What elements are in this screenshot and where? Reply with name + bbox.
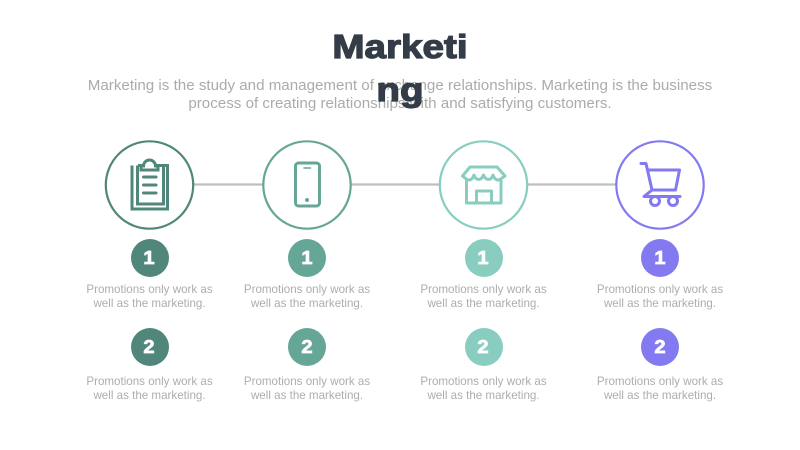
column 2	[244, 239, 370, 402]
caption	[597, 375, 723, 402]
caption: well as the marketing.	[427, 389, 540, 402]
subtitle: process of creating relationships with and satisfying customers.	[188, 95, 612, 112]
subtitle: Marketing is the study and management of exchange relationships. Marketing is the business	[88, 77, 712, 94]
caption: well as the marketing.	[93, 297, 206, 310]
badge 2	[130, 328, 168, 366]
title	[332, 28, 468, 109]
caption: Promotions only work as	[597, 283, 723, 296]
caption	[244, 283, 370, 310]
caption	[420, 283, 547, 310]
caption: Promotions only work as	[86, 375, 213, 388]
badge 2: 2	[478, 337, 489, 357]
caption	[86, 283, 213, 310]
caption: Promotions only work as	[244, 375, 370, 388]
column 1	[86, 239, 213, 402]
badge 1: 1	[144, 248, 155, 268]
badge 2: 2	[654, 337, 666, 357]
icon: phone	[263, 141, 351, 229]
caption: Promotions only work as	[420, 375, 547, 388]
caption: Promotions only work as	[597, 375, 723, 388]
badge 1	[288, 239, 326, 277]
caption: Promotions only work as	[420, 283, 547, 296]
caption: well as the marketing.	[427, 297, 540, 310]
badge 1: 1	[654, 248, 666, 268]
badge 2: 2	[301, 337, 313, 357]
title: ng	[376, 71, 424, 108]
badge 2	[641, 328, 679, 366]
title: Marketi	[332, 28, 468, 65]
badge 1	[464, 239, 502, 277]
caption	[597, 283, 723, 310]
icon: clipboard	[106, 141, 193, 229]
caption: well as the marketing.	[604, 297, 716, 310]
column 4	[597, 239, 723, 402]
badge 1: 1	[301, 248, 313, 268]
caption	[86, 375, 213, 402]
caption: Promotions only work as	[244, 283, 370, 296]
caption	[244, 375, 370, 402]
caption: well as the marketing.	[251, 297, 363, 310]
caption: well as the marketing.	[604, 389, 716, 402]
subtitle	[88, 77, 712, 112]
badge 1	[130, 239, 168, 277]
caption: well as the marketing.	[93, 389, 206, 402]
badge 1: 1	[478, 248, 489, 268]
caption	[420, 375, 547, 402]
badge 2	[288, 328, 326, 366]
caption: well as the marketing.	[251, 389, 363, 402]
icon: store	[440, 141, 527, 229]
badge 2	[464, 328, 502, 366]
badge 1	[641, 239, 679, 277]
caption: Promotions only work as	[86, 283, 213, 296]
column 3	[420, 239, 547, 402]
badge 2: 2	[144, 337, 155, 357]
icon: cart	[616, 141, 704, 229]
